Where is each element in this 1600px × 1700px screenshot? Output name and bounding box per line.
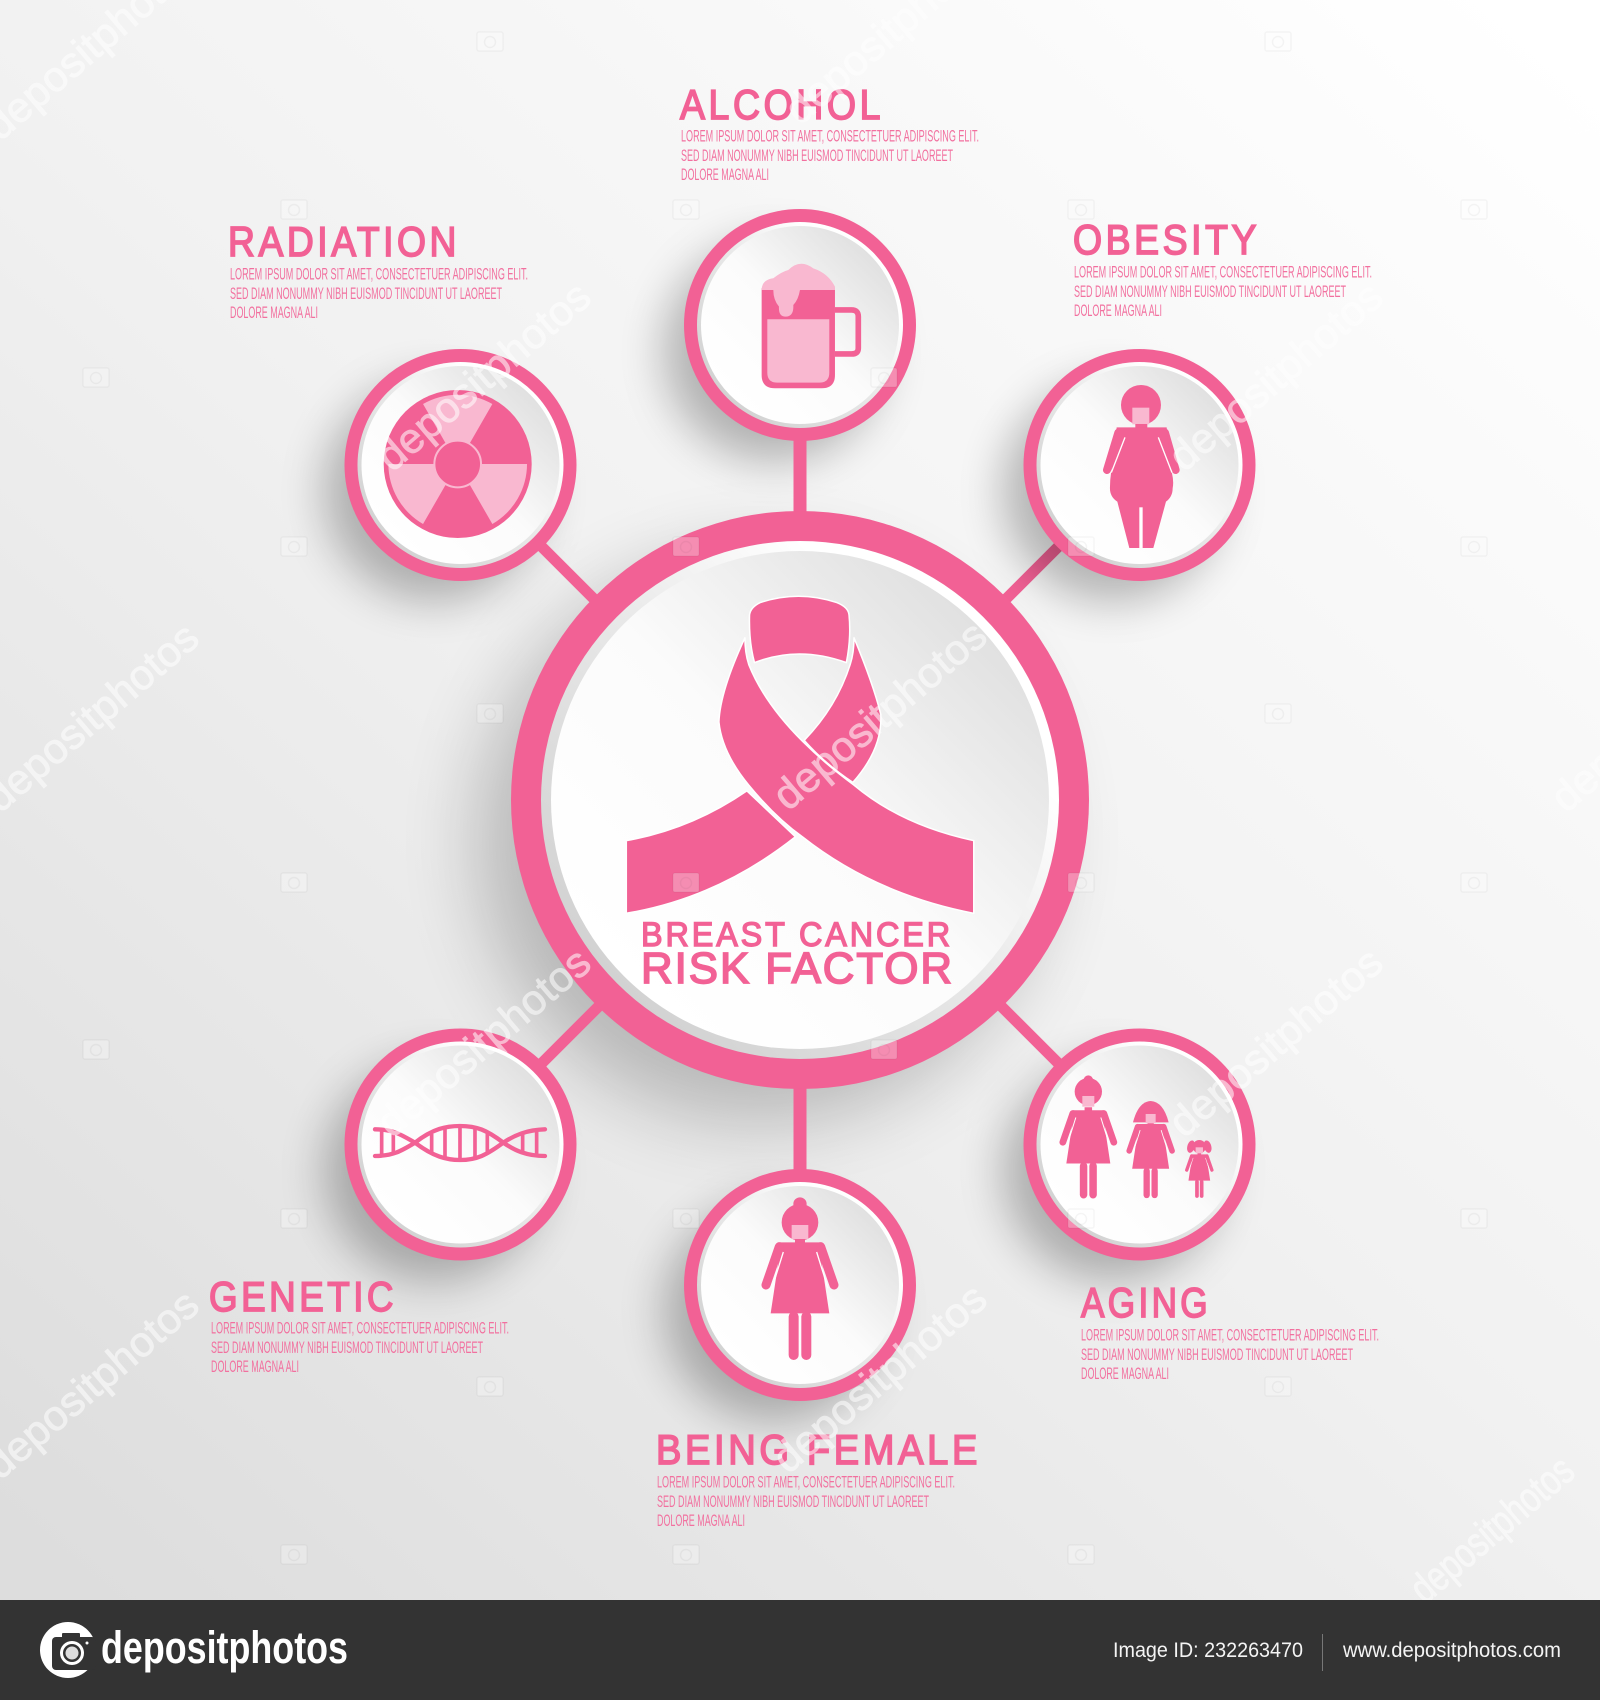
- panel: obesity: [1024, 349, 1256, 581]
- heading: aging: AGING: [1081, 1279, 1211, 1326]
- text block: alcohol: [681, 126, 979, 184]
- text block: alcohol: SED DIAM NONUMMY NIBH EUISMOD TINCIDUNT UT LAOREET: [681, 146, 953, 165]
- icon: daughter: [1129, 1101, 1172, 1198]
- heading: being female: BEING FEMALE: [656, 1426, 981, 1473]
- text block: genetic: SED DIAM NONUMMY NIBH EUISMOD TINCIDUNT UT LAOREET: [211, 1338, 483, 1357]
- icon: obese woman: [1107, 385, 1176, 548]
- icon: radiation symbol: [384, 390, 532, 538]
- watermarks: depositphotos: [1159, 938, 1391, 1146]
- text block: radiation: DOLORE MAGNA ALI: [230, 303, 318, 322]
- watermarks: depositphotos: [367, 938, 599, 1146]
- heading: radiation: RADIATION: [228, 218, 460, 265]
- text block: obesity: SED DIAM NONUMMY NIBH EUISMOD TINCIDUNT UT LAOREET: [1074, 282, 1346, 301]
- text block: genetic: LOREM IPSUM DOLOR SIT AMET, CONSECTETUER ADIPISCING ELIT.: [211, 1318, 509, 1338]
- central circle: breast cancer risk factor: [511, 511, 1089, 1089]
- icon: depositphotos logo: [40, 1622, 96, 1678]
- text block: obesity: [1074, 262, 1372, 320]
- text block: aging: [1081, 1326, 1379, 1383]
- panel: alcohol: [684, 209, 916, 441]
- icon: three generations of women: [1063, 1075, 1213, 1198]
- icon: dna helix: [375, 1126, 545, 1160]
- heading: alcohol: ALCOHOL: [680, 81, 884, 128]
- text block: being female: SED DIAM NONUMMY NIBH EUISMOD TINCIDUNT UT LAOREET: [657, 1492, 929, 1511]
- text block: radiation: SED DIAM NONUMMY NIBH EUISMOD TINCIDUNT UT LAOREET: [230, 284, 502, 303]
- heading: obesity: OBESITY: [1073, 216, 1260, 263]
- text block: radiation: [230, 264, 528, 322]
- icon: child: [1186, 1140, 1213, 1198]
- watermarks: depositphotos: [1159, 272, 1391, 480]
- website: www.depositphotos.com: [1342, 1639, 1561, 1662]
- panel: genetic: [344, 1028, 576, 1260]
- panel: being female: [684, 1169, 916, 1401]
- watermarks: depositphotos: [763, 1274, 995, 1482]
- text block: being female: [657, 1472, 955, 1530]
- text block: being female: DOLORE MAGNA ALI: [657, 1511, 745, 1530]
- panel: radiation: [344, 349, 576, 581]
- connector lines: [520, 420, 1080, 1190]
- icon: woman: [766, 1197, 834, 1360]
- text block: alcohol: LOREM IPSUM DOLOR SIT AMET, CONSECTETUER ADIPISCING ELIT.: [681, 126, 979, 146]
- shadow: obesity circle: [1003, 381, 1223, 601]
- icon: beer mug: [762, 264, 858, 388]
- text block: radiation: LOREM IPSUM DOLOR SIT AMET, CONSECTETUER ADIPISCING ELIT.: [230, 264, 528, 284]
- heading: genetic: GENETIC: [209, 1273, 397, 1320]
- icon: mother: [1063, 1075, 1114, 1198]
- watermarks: depositphotos: [367, 272, 599, 480]
- panel: aging: [1024, 1028, 1256, 1260]
- text block: genetic: DOLORE MAGNA ALI: [211, 1357, 299, 1376]
- text block: aging: DOLORE MAGNA ALI: [1081, 1364, 1169, 1383]
- text block: genetic: [211, 1318, 509, 1376]
- heading: breast cancer: BREAST CANCER: [641, 916, 953, 954]
- text block: alcohol: DOLORE MAGNA ALI: [681, 165, 769, 184]
- text block: aging: SED DIAM NONUMMY NIBH EUISMOD TINCIDUNT UT LAOREET: [1081, 1345, 1353, 1364]
- logo wordmark: depositphotos: [101, 1622, 348, 1673]
- footer bar: [0, 1600, 1600, 1700]
- icon: pink ribbon: [626, 596, 974, 913]
- shadows: [324, 241, 1223, 1421]
- text block: obesity: DOLORE MAGNA ALI: [1074, 301, 1162, 320]
- heading: risk factor: RISK FACTOR: [641, 944, 954, 993]
- watermarks: depositphotos: [763, 611, 995, 819]
- text block: being female: LOREM IPSUM DOLOR SIT AMET, CONSECTETUER ADIPISCING ELIT.: [657, 1472, 955, 1492]
- image id: Image ID: 232263470: [1113, 1639, 1303, 1662]
